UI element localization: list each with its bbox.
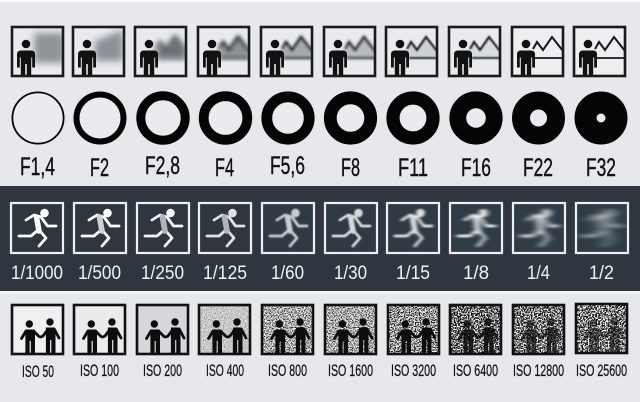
label: 1/1000: 1/1000 <box>11 263 63 284</box>
label: ISO 400: ISO 400 <box>206 362 244 380</box>
icon: aperture F8 <box>330 98 371 138</box>
icon: aperture F11 <box>393 98 433 138</box>
label: F11: F11 <box>398 154 428 182</box>
label: 1/2: 1/2 <box>589 263 614 284</box>
label: ISO 800: ISO 800 <box>268 362 307 380</box>
icon: runner 1/15 <box>387 203 439 253</box>
shutter labels <box>11 263 614 284</box>
label: ISO 1600: ISO 1600 <box>328 362 373 380</box>
icon: aperture F4 <box>204 96 247 140</box>
icon: aperture F22 <box>521 100 556 136</box>
icon: runner 1/500 <box>74 203 126 253</box>
icon: F11 scene <box>386 27 437 76</box>
label: ISO 12800: ISO 12800 <box>513 362 564 380</box>
label: 1/60: 1/60 <box>271 263 304 284</box>
icon: aperture F32 <box>586 102 616 134</box>
icon: runner 1/30 <box>325 203 377 253</box>
icon: ISO 1600 <box>325 305 376 354</box>
icon: ISO 3200 <box>388 305 439 354</box>
label: ISO 6400: ISO 6400 <box>453 362 498 380</box>
icon: F2 scene <box>73 27 124 76</box>
icon: ISO 6400 <box>450 305 501 354</box>
label: 1/4: 1/4 <box>527 263 550 284</box>
icon: runner 1/250 <box>137 203 189 253</box>
icon: ISO 100 <box>74 305 125 354</box>
icon: F22 scene <box>512 27 563 76</box>
icon: aperture F16 <box>458 100 494 136</box>
label: ISO 100: ISO 100 <box>80 362 119 380</box>
icon: ISO 25600 <box>576 304 627 353</box>
label: ISO 3200: ISO 3200 <box>391 362 436 380</box>
label: 1/30: 1/30 <box>334 263 367 284</box>
label: F32: F32 <box>586 154 616 182</box>
top edge strip <box>0 0 640 2</box>
label: F5,6: F5,6 <box>270 152 305 180</box>
icon: aperture F2,8 <box>141 96 185 140</box>
label: 1/250: 1/250 <box>141 263 184 284</box>
icon: ISO 12800 <box>513 305 564 354</box>
label: F22: F22 <box>523 154 553 182</box>
light strip below band <box>0 291 640 294</box>
label: F1,4: F1,4 <box>20 153 55 181</box>
label: 1/8: 1/8 <box>463 263 489 284</box>
icon: runner 1/1000 <box>11 203 63 253</box>
label: F4: F4 <box>215 154 234 182</box>
icon: F1,4 scene <box>12 27 64 76</box>
panel: aperture rings <box>12 92 616 144</box>
icon: aperture F2 <box>76 94 124 142</box>
f-stop labels <box>20 152 616 182</box>
icon: ISO 200 <box>137 305 188 354</box>
icon: F16 scene <box>449 27 500 76</box>
icon: runner 1/2 <box>576 203 628 253</box>
icon: F32 scene <box>574 27 625 76</box>
label: ISO 200: ISO 200 <box>143 362 182 380</box>
panel: shutter speed band <box>0 186 640 291</box>
label: ISO 50: ISO 50 <box>22 363 54 381</box>
icon: F8 scene <box>324 27 375 76</box>
label: F2,8: F2,8 <box>145 152 180 180</box>
icon: aperture F5,6 <box>267 97 309 139</box>
icon: ISO 50 <box>12 305 63 354</box>
panel: aperture depth of field icons <box>12 27 625 76</box>
icon: F5,6 scene <box>261 27 312 76</box>
icon: ISO 400 <box>199 305 250 354</box>
icon: F4 scene <box>198 27 249 76</box>
icon: aperture F1,4 <box>12 92 64 144</box>
panel: ISO noise icons <box>12 304 627 381</box>
icon: ISO 800 <box>262 305 313 354</box>
label: 1/15: 1/15 <box>396 263 430 284</box>
icon: runner 1/125 <box>199 203 251 253</box>
icon: F2,8 scene <box>135 27 186 76</box>
label: 1/125: 1/125 <box>203 263 247 284</box>
label: F2: F2 <box>90 154 109 182</box>
label: 1/500: 1/500 <box>78 263 121 284</box>
icon: runner 1/60 <box>262 203 314 253</box>
label: F16: F16 <box>461 154 491 182</box>
band background <box>0 186 640 291</box>
icon: runner 1/4 <box>513 203 565 253</box>
label: F8: F8 <box>341 154 360 182</box>
icon: runner 1/8 <box>450 203 502 253</box>
ISO labels <box>22 362 627 381</box>
